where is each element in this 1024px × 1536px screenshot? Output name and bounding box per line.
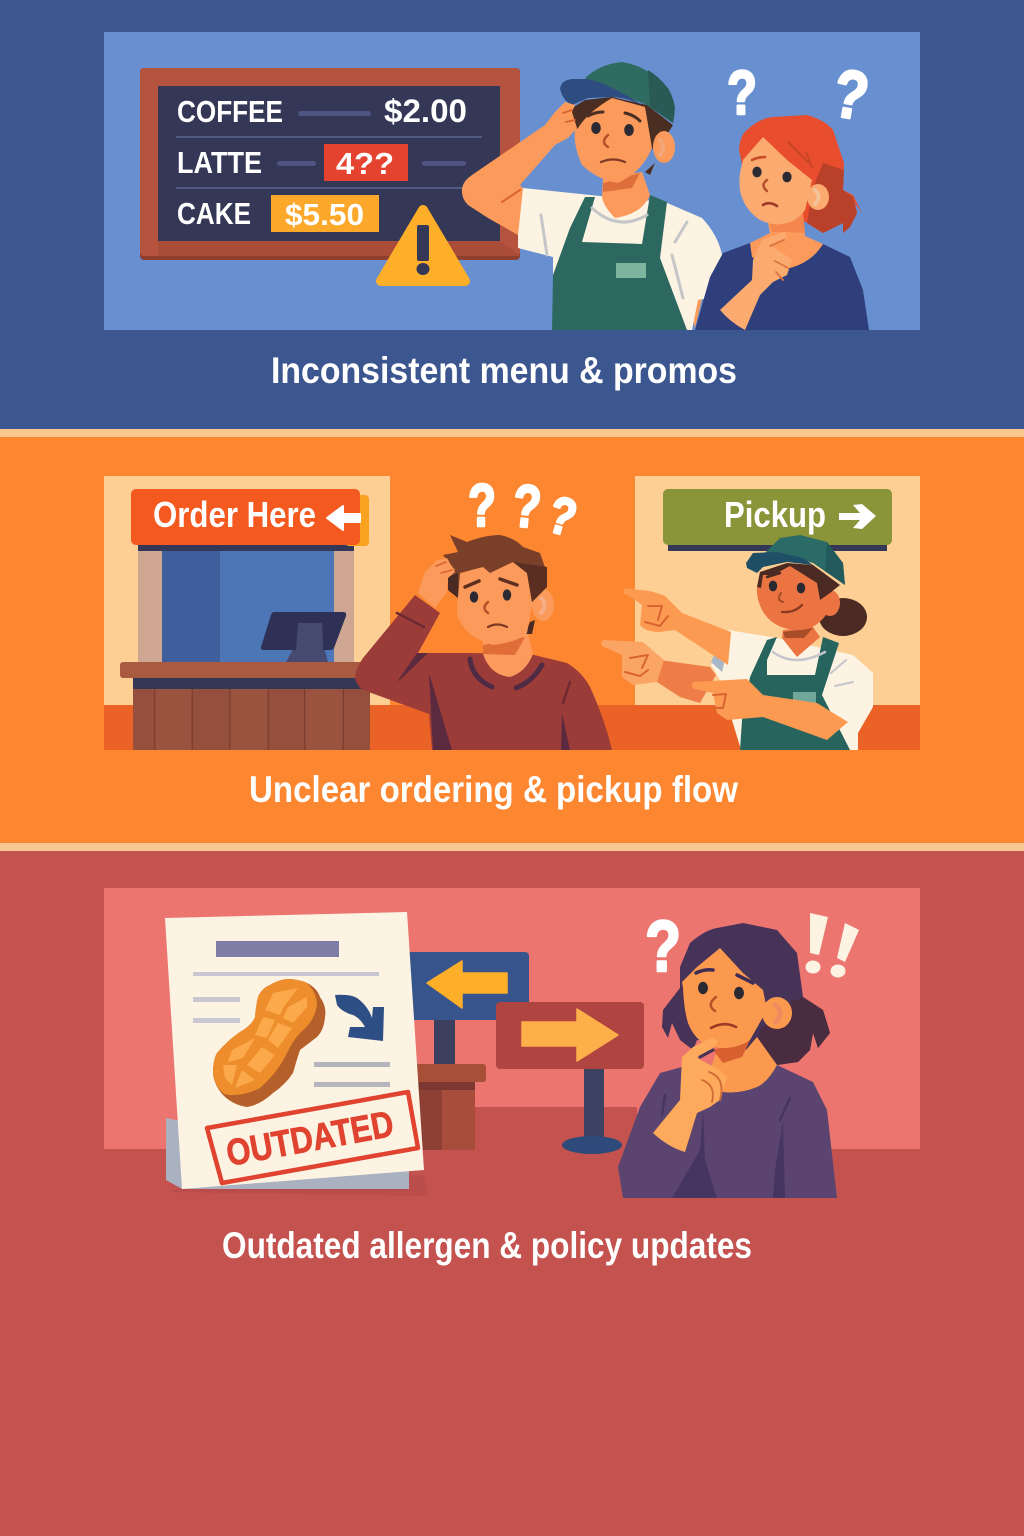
apron [740,637,850,750]
document: allergen sheet [165,912,428,1196]
hair [662,923,830,1065]
hand on chin [653,1037,727,1152]
person: confused barista scratching head [462,62,725,330]
question marks above woman: ? [828,55,874,135]
menu row: coffee [177,93,467,129]
sweater [355,595,612,750]
question marks above woman: ? [727,59,757,128]
sign: left arrow [400,952,529,1066]
person: barista pointing [601,535,873,750]
neck [705,1037,777,1092]
icon: POS terminal [261,612,346,662]
sign: right arrow [496,1002,644,1154]
icon: left arrow [327,506,360,530]
person: confused woman with red hair [695,115,869,330]
heading: outdated allergen and policy updates: Outdated allergen & policy updates [222,1225,752,1266]
head [682,948,767,1048]
panel 1 background [104,32,920,330]
question marks above woman [727,55,874,135]
icon: right arrow [839,504,876,529]
left back wall [104,476,390,705]
question and exclamation marks [645,907,859,987]
order window and counter [120,548,372,750]
menu board [140,68,520,260]
question and exclamation marks: ? [645,907,681,987]
icon: curved arrow [335,995,384,1041]
question marks above customer: ? [509,472,544,541]
back wall shade [475,1107,637,1149]
heading: unclear ordering and pickup flow: Unclear ordering & pickup flow [249,769,738,810]
panel: inconsistent menu and promos [104,32,920,330]
menu row: cake [177,195,379,232]
person: puzzled woman [618,923,837,1198]
arm pointing up [624,588,731,665]
sweater [618,1065,837,1198]
head [457,558,533,645]
heading: inconsistent menu and promos: Inconsistent menu & promos [271,350,737,391]
person: confused customer [355,535,612,750]
menu row: latte [177,144,466,181]
menu row: cake: CAKE [177,196,251,231]
head [757,563,830,630]
shirt [711,630,873,750]
face [588,112,640,162]
menu row: coffee: COFFEE [177,94,283,129]
question marks above customer: ? [468,472,496,539]
raised arm [462,102,577,235]
menu row: latte: LATTE [177,145,262,180]
arm pointing low [692,679,848,740]
stamp: outdated: OUTDATED [223,1103,397,1174]
panel: outdated allergen and policy updates [104,888,920,1198]
sign: pickup: Pickup [724,494,826,535]
icon: peanut [213,979,325,1107]
sign: pickup [663,489,892,551]
menu row: coffee: $2.00 [384,93,467,129]
icon: warning triangle [381,210,465,281]
neck [483,630,533,677]
sign: order here [131,489,369,551]
stand [410,1064,486,1150]
question marks above customer [468,472,583,548]
arm pointing middle [601,640,716,703]
neck [782,627,820,657]
floor [104,705,920,750]
panel 3 background [104,888,920,1149]
hand on neck [720,232,792,330]
question marks above customer: ? [542,486,583,548]
menu row: latte: 4?? [336,146,394,181]
menu row: cake: $5.50 [285,197,364,232]
cap [560,62,675,123]
right back wall [635,476,920,705]
sign: order here: Order Here [153,494,316,535]
cap [746,535,845,585]
hand on head [418,558,455,608]
panel: unclear ordering and pickup flow [104,472,920,750]
